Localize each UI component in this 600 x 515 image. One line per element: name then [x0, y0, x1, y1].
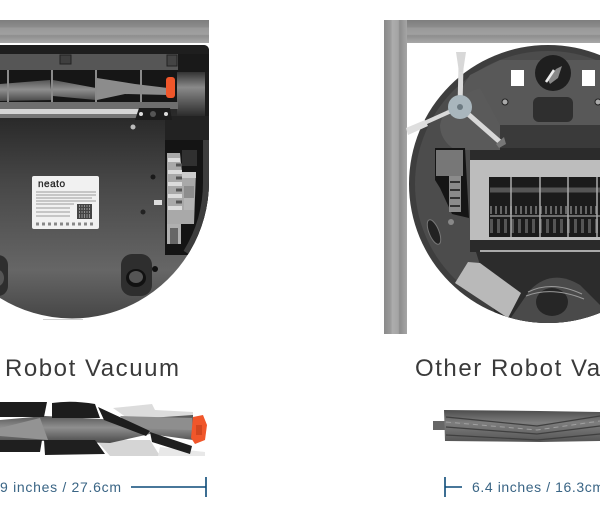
frame band: Neato photo — [0, 20, 209, 43]
brush: Neato combo brush — [0, 402, 207, 456]
robot underside: Neato — [0, 45, 210, 320]
icon: side brush — [406, 52, 506, 148]
icon: front wheel — [535, 55, 571, 91]
clip with screws — [135, 108, 172, 120]
icon: left caster — [0, 255, 8, 296]
icon: orange brush cap in robot — [166, 77, 175, 98]
small holes and slot — [140, 174, 162, 272]
icon: wheel — [167, 150, 197, 244]
panel: other robot vacuum — [384, 20, 600, 334]
icon: right caster — [121, 254, 152, 296]
icon: orange cap — [191, 415, 207, 444]
robot underside: other — [409, 45, 600, 330]
icon: front window left — [511, 70, 524, 86]
panel: Neato robot vacuum — [0, 20, 210, 320]
brush: other rubber brush — [433, 410, 600, 442]
icon: left wheel — [435, 148, 469, 218]
dimension: other brush length — [445, 477, 600, 497]
icon: bumper button — [426, 219, 442, 245]
dimension: Neato brush length — [0, 477, 206, 497]
vent grille — [533, 97, 573, 122]
brush housing — [470, 160, 600, 240]
sticker logo: neato — [38, 179, 65, 190]
label sticker — [32, 176, 99, 229]
dust bin — [476, 252, 600, 330]
frame band: other photo — [384, 20, 600, 334]
heading: Robot Vacuum: Robot Vacuum — [5, 355, 181, 382]
QR code — [77, 204, 92, 219]
light grey bumper segment — [455, 262, 521, 318]
icon: front window right — [582, 70, 595, 86]
dimension: Neato brush length: 9 inches / 27.6cm — [0, 479, 121, 495]
